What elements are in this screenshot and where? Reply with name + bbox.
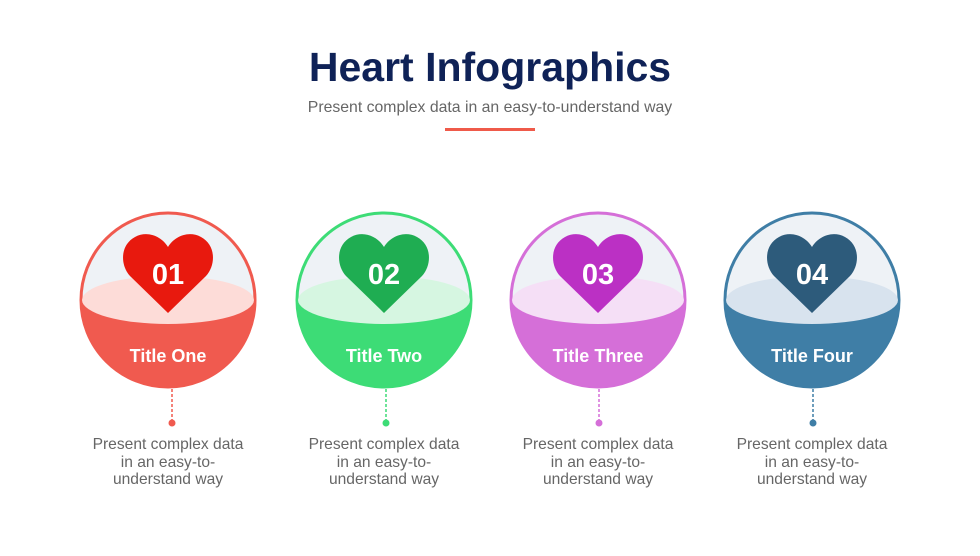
item 1: understand way [113, 471, 223, 488]
item 1: in an easy-to- [121, 454, 215, 471]
icon: heart 03 [553, 234, 643, 313]
item 1: Present complex data [93, 436, 244, 453]
icon: heart 04: 04 [796, 259, 828, 291]
item 4 [725, 213, 899, 488]
item 4: in an easy-to- [765, 454, 859, 471]
icon: heart 02 [339, 234, 429, 313]
icon: heart 04 [767, 234, 857, 313]
item 3: Title Three [553, 346, 643, 366]
item 3: understand way [543, 471, 653, 488]
item 1 [81, 213, 255, 488]
item 2: Title Two [346, 346, 422, 366]
item 3: in an easy-to- [551, 454, 645, 471]
icon: heart 03: 03 [582, 259, 614, 291]
item 4: Present complex data [737, 436, 888, 453]
item 2: Present complex data [309, 436, 460, 453]
item 4: understand way [757, 471, 867, 488]
item 2 [297, 213, 471, 488]
item 2: understand way [329, 471, 439, 488]
icon: heart 01 [123, 234, 213, 313]
item 2: in an easy-to- [337, 454, 431, 471]
icon: heart 02: 02 [368, 259, 400, 291]
icon: heart 01: 01 [152, 259, 184, 291]
item 4: Title Four [771, 346, 853, 366]
underline accent [445, 128, 535, 131]
subtitle: Present complex data in an easy-to-understand way [308, 99, 672, 116]
title: Heart Infographics [309, 44, 671, 90]
item 3: Present complex data [523, 436, 674, 453]
item 3 [511, 213, 685, 488]
item 1: Title One [130, 346, 206, 366]
